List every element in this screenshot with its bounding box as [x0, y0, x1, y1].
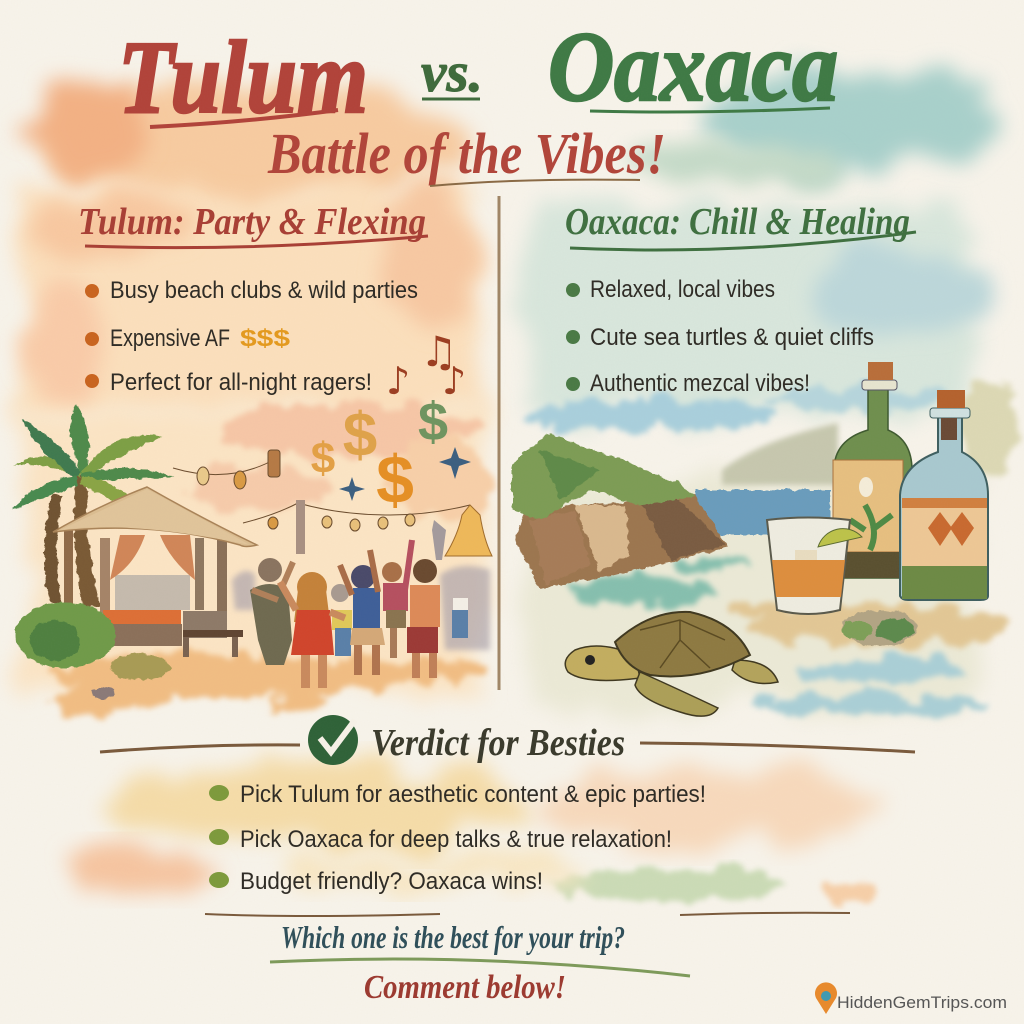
icon: music notes: ♪	[442, 359, 466, 403]
call to action: Which one is the best for your trip?	[281, 919, 625, 955]
watercolor wash: verdict panel	[65, 765, 880, 902]
icon: dollar signs: $	[376, 442, 414, 518]
illustration: palm trees	[12, 404, 175, 608]
list: Tulum points: Perfect for all-night ragers!	[110, 369, 372, 396]
call to action: Comment below!	[364, 969, 566, 1006]
icon: check mark	[308, 715, 358, 765]
illustration: beach hut	[53, 487, 257, 657]
verdict list	[209, 781, 706, 895]
icon: music notes	[386, 327, 466, 403]
illustration: cliff	[512, 433, 728, 588]
list: Oaxaca points: Cute sea turtles & quiet cliffs	[590, 324, 874, 351]
heading: Oaxaca: Oaxaca: Chill & Healing	[565, 201, 910, 243]
illustration: lower water	[750, 656, 990, 715]
list: Oaxaca points: Relaxed, local vibes	[590, 276, 775, 303]
watercolor wash: left warm panel	[20, 82, 490, 690]
illustration: sand	[730, 603, 1010, 647]
list: Tulum points: $$$	[240, 325, 291, 352]
list: Oaxaca points: Authentic mezcal vibes!	[590, 370, 810, 397]
title: Oaxaca: Oaxaca	[548, 11, 838, 122]
title: vs: vs.	[421, 42, 483, 104]
divider	[498, 196, 500, 690]
verdict list: Pick Tulum for aesthetic content & epic parties!	[240, 781, 706, 808]
illustration: mezcal bottles	[833, 362, 988, 600]
title: Tulum: Tulum	[118, 20, 368, 135]
illustration: distant hills	[722, 423, 838, 485]
verdict heading	[100, 715, 915, 765]
background silhouettes	[232, 566, 490, 650]
head	[565, 646, 640, 680]
watercolor wash: right cool panel	[520, 70, 1018, 710]
icon: music notes: ♫	[420, 327, 458, 376]
icon: dollar signs	[311, 392, 471, 518]
verdict list: Pick Oaxaca for deep talks & true relaxation!	[240, 826, 672, 853]
illustration: moss rocks	[842, 610, 918, 646]
verdict list: Budget friendly? Oaxaca wins!	[240, 868, 543, 895]
heading: Tulum: Tulum: Party & Flexing	[78, 201, 426, 243]
rear flipper	[732, 660, 778, 684]
illustration: glass of mezcal	[767, 518, 862, 614]
logo: HiddenGemTrips.com	[815, 982, 1007, 1014]
list: Tulum points	[85, 277, 418, 396]
shell	[615, 612, 750, 676]
title	[118, 11, 838, 186]
list: Tulum points: Busy beach clubs & wild parties	[110, 277, 418, 304]
list: Tulum points: Expensive AF	[110, 325, 230, 352]
verdict section	[100, 715, 915, 895]
icon: dollar signs: $	[311, 434, 335, 483]
illustration: bushes	[15, 602, 170, 699]
blue bottle	[900, 390, 988, 600]
logo: HiddenGemTrips.com: HiddenGemTrips.com	[837, 993, 1007, 1012]
icon: dollar signs: $	[343, 401, 377, 470]
green bottle	[833, 362, 912, 578]
illustration: string lights	[173, 450, 492, 560]
panel: Tulum	[12, 201, 492, 714]
illustration: sea turtle	[565, 612, 778, 716]
verdict heading: Verdict for Besties	[371, 722, 625, 764]
illustration: sea	[695, 490, 830, 535]
icon: music notes: ♪	[386, 359, 410, 403]
front flipper	[635, 672, 718, 716]
subtitle: Battle of the Vibes!	[267, 121, 666, 186]
illustration: shallow water	[565, 558, 750, 604]
panel: Oaxaca	[512, 201, 1010, 716]
call to action	[205, 913, 850, 1006]
illustration: ground sand	[50, 653, 480, 714]
list: Oaxaca points	[566, 276, 874, 397]
icon: dollar signs: $	[418, 392, 448, 452]
illustration: crowd of dancers	[232, 540, 490, 688]
